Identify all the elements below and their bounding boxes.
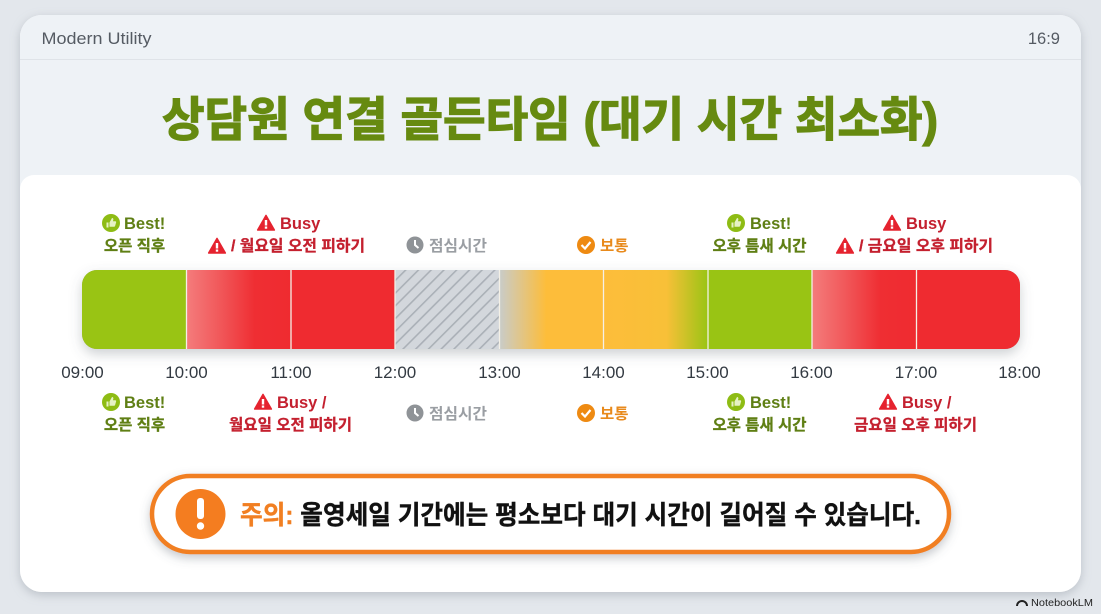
lower label: Best afternoon: Best! xyxy=(750,394,791,412)
lower label: lunch xyxy=(406,404,487,423)
lower label: Busy Monday: 월요일 오전 피하기 xyxy=(229,416,352,434)
upper label: Busy Monday: / 월요일 오전 피하기 xyxy=(231,237,365,255)
header label: 16:9: 16:9 xyxy=(1028,30,1060,48)
lower label: moderate: 보통 xyxy=(600,405,629,423)
upper label: moderate: 보통 xyxy=(600,237,629,255)
lower label: Best open xyxy=(102,393,165,434)
icon: exclamation xyxy=(176,489,226,539)
lower label: Busy Monday xyxy=(229,394,352,434)
upper label: Busy Monday: Busy xyxy=(280,215,321,233)
upper label: Best open: Best! xyxy=(124,215,165,233)
title: 상담원 연결 골든타임 (대기 시간 최소화) xyxy=(162,93,938,146)
time axis labels xyxy=(61,363,1041,382)
upper label: Busy Friday: Busy xyxy=(906,215,947,233)
timeline bar xyxy=(82,270,1022,349)
lower labels xyxy=(102,393,977,434)
upper label: Busy Friday: / 금요일 오후 피하기 xyxy=(859,237,993,255)
lower label: Busy Friday xyxy=(854,394,977,434)
time axis labels: 15:00 xyxy=(686,363,729,382)
upper label: lunch xyxy=(406,236,487,255)
lower label: Best afternoon xyxy=(712,393,806,434)
time axis labels: 12:00 xyxy=(374,363,416,382)
lower label: Best open: 오픈 직후 xyxy=(104,416,165,434)
upper label: Busy Monday xyxy=(209,215,365,255)
time axis labels: 18:00 xyxy=(998,363,1041,382)
time axis labels: 09:00 xyxy=(61,363,104,382)
upper label: Best open: 오픈 직후 xyxy=(104,237,165,255)
upper label: Best afternoon: 오후 틈새 시간 xyxy=(712,237,806,255)
lower label: moderate xyxy=(577,404,629,423)
watermark: NotebookLM: NotebookLM xyxy=(1031,597,1093,609)
upper labels xyxy=(102,214,993,255)
lower label: lunch: 점심시간 xyxy=(429,405,487,423)
time axis labels: 16:00 xyxy=(790,363,833,382)
upper label: Best afternoon: Best! xyxy=(750,215,791,233)
lower label: Best open: Best! xyxy=(124,394,165,412)
upper label: moderate xyxy=(577,236,629,255)
upper label: lunch: 점심시간 xyxy=(429,237,487,255)
upper label: Best afternoon xyxy=(712,214,806,255)
lower label: Busy Friday: Busy / xyxy=(902,394,952,412)
callout: caution xyxy=(152,476,949,552)
lower label: Best afternoon: 오후 틈새 시간 xyxy=(712,416,806,434)
time axis labels: 17:00 xyxy=(895,363,937,382)
upper label: Best open xyxy=(102,214,165,255)
header label: Modern Utility: Modern Utility xyxy=(42,30,152,48)
time axis labels: 13:00 xyxy=(478,363,521,382)
lower label: Busy Friday: 금요일 오후 피하기 xyxy=(854,416,977,434)
time axis labels: 14:00 xyxy=(582,363,625,382)
time axis labels: 11:00 xyxy=(270,363,312,382)
upper label: Busy Friday xyxy=(837,215,993,255)
callout text: 주의: 올영세일 기간에는 평소보다 대기 시간이 길어질 수 있습니다. xyxy=(240,500,921,530)
time axis labels: 10:00 xyxy=(165,363,208,382)
lower label: Busy Monday: Busy / xyxy=(277,394,327,412)
